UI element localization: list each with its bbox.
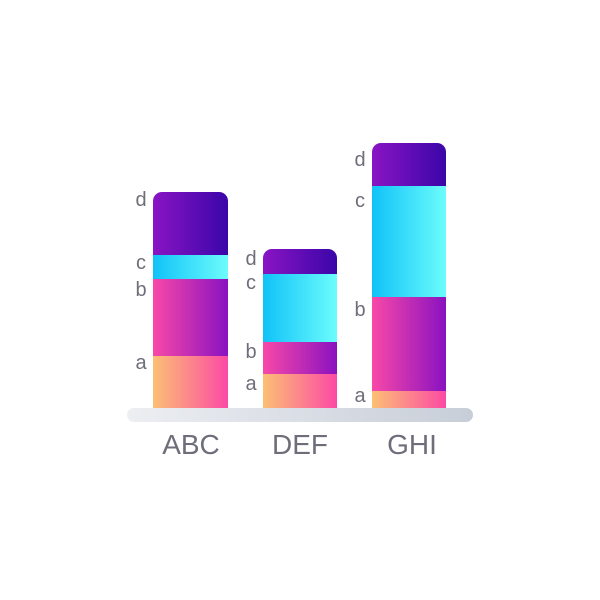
text: c [246,272,256,294]
baseline [127,408,473,422]
text: GHI [387,429,437,460]
text: c [136,252,146,274]
text: d [354,149,366,171]
text: a [245,373,257,395]
text: a [354,385,366,407]
text: b [354,299,366,321]
bar: GHI [372,143,446,408]
segment labels [135,149,366,407]
text: c [355,190,365,212]
text: b [245,341,257,363]
bar: ABC [153,192,228,408]
category labels [162,429,437,460]
text: d [245,248,257,270]
text: ABC [162,429,220,460]
text: a [135,352,147,374]
text: b [135,279,147,301]
text: d [135,189,147,211]
bar: DEF [263,249,337,408]
text: DEF [272,429,328,460]
